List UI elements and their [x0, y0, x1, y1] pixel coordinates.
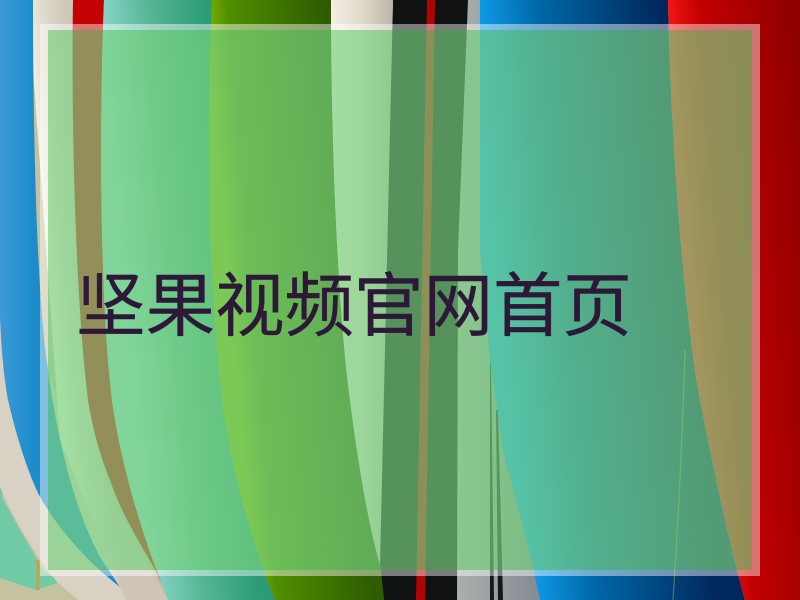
sail: white centre	[331, 0, 393, 565]
sail: left blue	[0, 0, 120, 587]
title: 坚果视频官网首页	[76, 267, 632, 345]
thin rope line in blue	[673, 350, 685, 600]
sail: thin red	[73, 0, 165, 592]
sail: green	[209, 0, 396, 600]
sail: white band	[28, 0, 168, 600]
sail: lower-left teal	[0, 480, 60, 590]
sail: lower-left white	[0, 280, 140, 600]
stripes: dark lines in grey	[490, 360, 503, 600]
sail: aqua	[101, 0, 278, 600]
thin mast in lower left	[36, 560, 40, 590]
sail: grey	[457, 0, 542, 600]
sail: right red	[668, 0, 800, 600]
sail: black	[378, 0, 472, 600]
stripe: red in black	[416, 0, 435, 600]
sail: main blue	[480, 0, 745, 600]
